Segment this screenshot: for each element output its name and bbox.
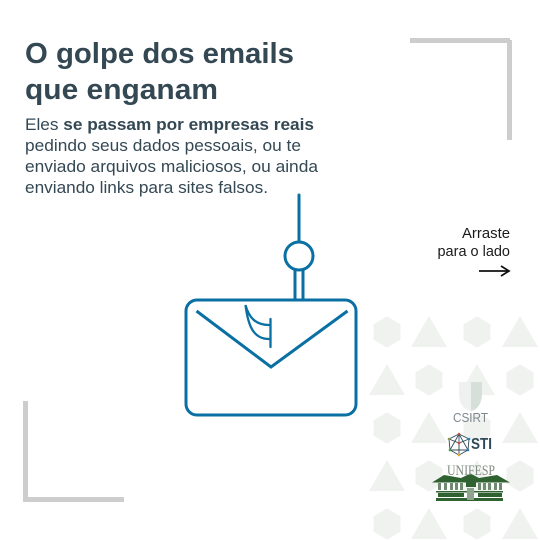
envelope flap: [196, 311, 348, 367]
logo: STI: [448, 433, 492, 456]
title: O golpe dos emails: [25, 38, 294, 70]
building door: [467, 488, 474, 500]
body text: enviando links para sites falsos.: [25, 178, 268, 197]
corner bracket: top right: [410, 38, 512, 140]
title: [25, 38, 294, 106]
body text: enviado arquivos maliciosos, ou ainda: [25, 157, 319, 176]
logo: CSIRT: [453, 382, 488, 425]
body text: [25, 115, 319, 197]
swipe hint: Arraste: [462, 226, 510, 242]
swipe hint: para o lado: [438, 244, 510, 260]
logo: CSIRT: CSIRT: [453, 411, 488, 425]
swipe hint: [438, 226, 510, 276]
body text: pedindo seus dados pessoais, ou te: [25, 136, 301, 155]
background pattern: hexagons and triangles: [369, 316, 538, 539]
title: que enganam: [25, 74, 218, 106]
hook barb: [246, 305, 270, 347]
logo: UNIFESP: [432, 463, 510, 501]
building columns: [438, 483, 502, 490]
logo: STI: STI: [471, 436, 492, 453]
icon: shield: [459, 382, 482, 411]
icon: phishing hook on envelope: [186, 195, 356, 415]
hook eye: [285, 242, 313, 270]
hook shank: [295, 269, 303, 299]
logo: UNIFESP: UNIFESP: [447, 463, 495, 479]
envelope body: [186, 300, 356, 415]
corner bracket: bottom left: [23, 401, 124, 502]
icon: arrow: [479, 266, 509, 276]
building roof: [432, 474, 510, 482]
fishing line: [298, 195, 300, 242]
icon: network polyhedron: [448, 433, 470, 456]
body text: Eles se passam por empresas reais: [25, 115, 314, 134]
building base: [436, 482, 503, 501]
